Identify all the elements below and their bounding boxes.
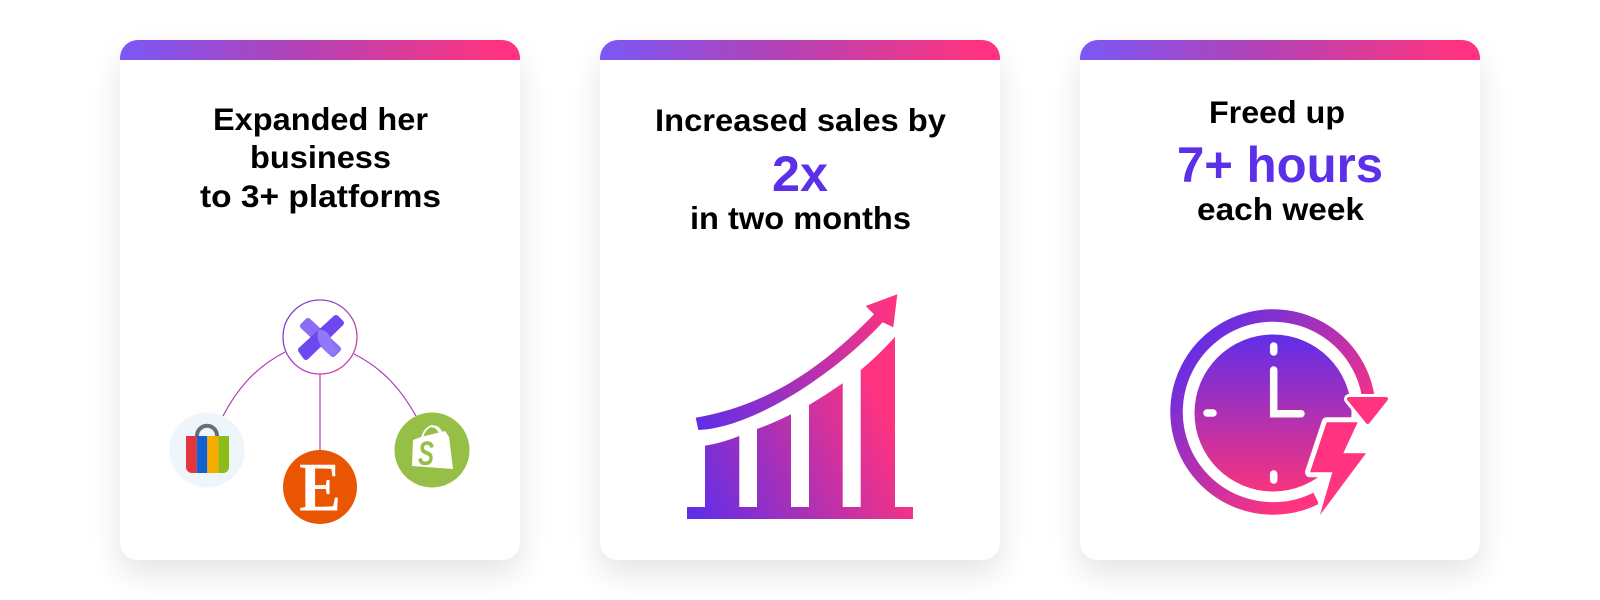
heading: expanded her business	[200, 101, 441, 214]
heading: increased sales by 2x: 2x	[772, 146, 828, 202]
gradient top bar	[1080, 40, 1480, 60]
heading: increased sales by 2x: Increased sales by	[655, 102, 946, 138]
arrow head	[1349, 399, 1386, 422]
connector lines	[223, 352, 416, 450]
circular arrow ring	[1177, 315, 1368, 508]
icon: Shopify: S	[418, 435, 434, 473]
panel: expanded business card	[120, 40, 520, 560]
clock face	[1194, 334, 1352, 492]
heading: increased sales by 2x: in two months	[690, 200, 911, 236]
trend arrow	[696, 294, 897, 430]
clock ticks and hands	[1207, 346, 1301, 480]
chart: rising bars with arrow	[687, 294, 913, 519]
icon: clock with lightning	[1170, 309, 1388, 515]
heading: freed up 7+ hours: Freed up	[1209, 94, 1345, 130]
icon: Etsy: E	[299, 450, 341, 527]
diagram: platform network	[170, 299, 470, 527]
heading: freed up 7+ hours: each week	[1197, 191, 1365, 227]
heading: freed up 7+ hours	[1177, 94, 1383, 227]
gradient top bar	[600, 40, 1000, 60]
heading: expanded her business: business	[250, 139, 391, 175]
heading: expanded her business: to 3+ platforms	[200, 178, 441, 214]
icon: Shopify	[394, 412, 470, 488]
gradient top bar	[120, 40, 520, 60]
icon: central logo	[283, 300, 357, 374]
icon: shopping bag marketplace	[170, 412, 244, 488]
bars and baseline	[687, 337, 913, 519]
lightning bolt	[1310, 422, 1366, 515]
icon: Etsy	[283, 450, 357, 527]
panel: increased sales card	[600, 40, 1000, 560]
panel: freed up hours card	[1080, 40, 1480, 560]
heading: increased sales by 2x	[655, 102, 946, 236]
heading: freed up 7+ hours: 7+ hours	[1177, 137, 1383, 193]
heading: expanded her business: Expanded her	[213, 101, 428, 137]
